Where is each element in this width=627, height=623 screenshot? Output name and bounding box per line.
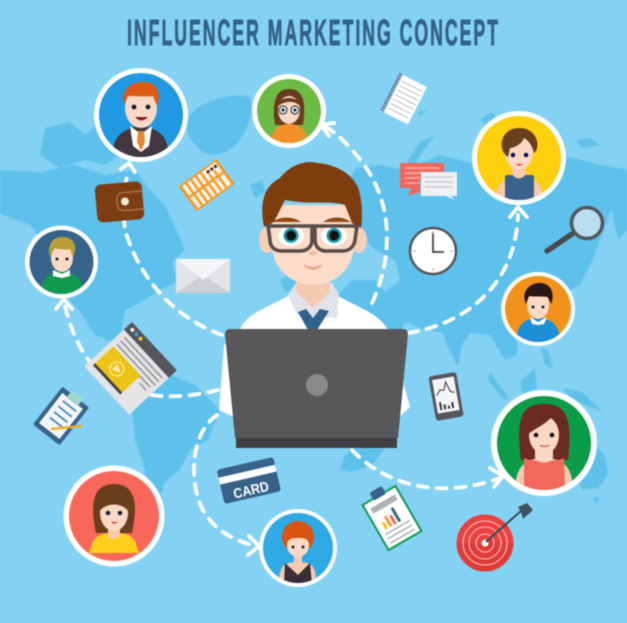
icon: credit card bbox=[217, 457, 281, 504]
icon: wallet bbox=[94, 181, 145, 223]
avatar: woman on yellow bbox=[472, 111, 566, 205]
nose and mouth bbox=[304, 250, 322, 269]
icon: target with dart bbox=[456, 503, 533, 572]
icon: report clipboard bbox=[359, 480, 421, 550]
icon: calculator bbox=[179, 159, 235, 211]
avatar: man on orange bbox=[501, 272, 575, 346]
glasses bbox=[268, 226, 357, 251]
tie bbox=[298, 309, 329, 330]
avatar: blond man bbox=[25, 226, 98, 298]
avatar: red-haired woman bbox=[259, 509, 337, 587]
avatar: woman on red bbox=[64, 466, 164, 566]
eyebrows bbox=[273, 218, 351, 222]
avatar: man in suit bbox=[94, 68, 188, 162]
hair bbox=[262, 162, 362, 228]
collar and neck bbox=[288, 278, 339, 318]
laptop bbox=[225, 329, 408, 448]
dashed connector arrows bbox=[56, 123, 527, 555]
face bbox=[272, 205, 354, 285]
icon: checklist clipboard bbox=[33, 384, 91, 445]
icon: browser window bbox=[84, 322, 177, 415]
central character with laptop bbox=[219, 162, 410, 448]
avatar: woman with glasses bbox=[252, 74, 326, 148]
icon: clock bbox=[410, 228, 456, 274]
icon: envelope bbox=[176, 259, 230, 293]
eyes bbox=[278, 226, 347, 246]
icon: credit card: CARD bbox=[232, 478, 270, 502]
avatar: woman on green bbox=[491, 390, 597, 496]
icon: tablet with chart bbox=[428, 372, 464, 421]
pencil on clipboard bbox=[52, 426, 81, 429]
world map bbox=[0, 96, 627, 504]
icon: chat bubbles bbox=[400, 163, 457, 200]
icon: magnifying glass bbox=[547, 208, 602, 251]
icon: notebook bbox=[382, 74, 427, 125]
ears bbox=[259, 227, 367, 253]
